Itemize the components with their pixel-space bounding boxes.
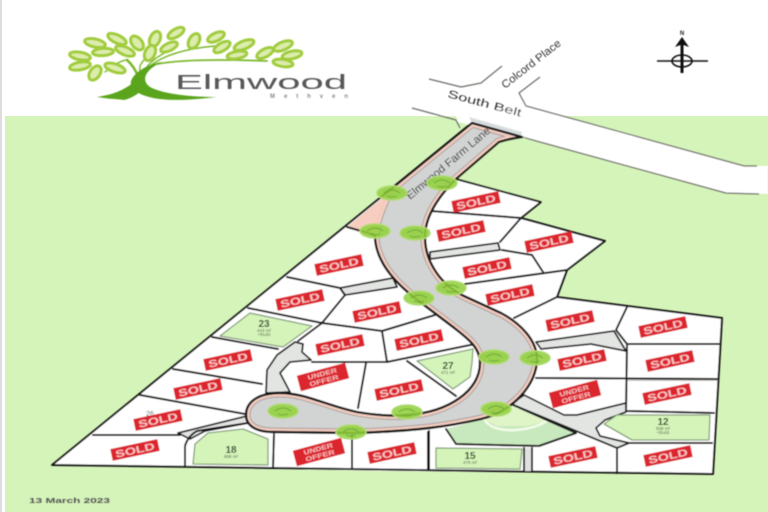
sold and under offer stickers: SOLD [379,382,420,401]
tree leaves [69,25,303,82]
lot 15: 15 [464,451,476,462]
sold and under offer stickers: SOLD [648,448,689,467]
lot 12: +Build [657,430,670,435]
sold and under offer stickers: SOLD [208,352,249,371]
south belt road [412,66,768,194]
sold and under offer stickers: SOLD [529,234,570,253]
sold and under offer stickers: UNDER [559,384,590,399]
sold and under offer stickers: SOLD [647,386,688,405]
wordmark: Elmwood: Elmwood [175,72,347,94]
sold and under offer stickers: OFFER [305,449,336,464]
lot 18 [193,429,268,465]
sold and under offer stickers: SOLD [490,287,531,306]
sold and under offer stickers: SOLD [562,352,603,371]
date: 13 March 2023 [29,498,110,505]
lot 18: 606 m² [224,454,238,459]
sold and under offer stickers: SOLD [138,412,179,431]
tree branches [105,46,267,78]
pink reserve triangle [347,190,392,240]
sold and under offer stickers: OFFER [309,374,340,389]
sold and under offer stickers: SOLD [372,445,413,464]
sold and under offer stickers: SOLD [178,381,219,400]
label: south belt: South Belt [446,88,523,120]
sold and under offer stickers: SOLD [467,260,508,279]
main road: Elmwood Farm Lane [246,123,537,433]
lanes [178,243,717,471]
sold and under offer stickers: UNDER [303,442,334,457]
wordmark: Methven: Methven [270,94,348,100]
sold and under offer stickers: UNDER [307,367,338,382]
lot 12: 938 m² [656,426,670,431]
sold and under offer stickers: SOLD [650,353,691,372]
lot 27 [417,349,473,389]
sold and under offer stickers: SOLD [320,337,361,356]
sold and under offer stickers: SOLD [115,442,156,461]
lot 12 [604,415,710,440]
lot 12: 12 [657,417,669,428]
lot number peeking behind sold label: 26 [146,411,154,418]
lot 15: 475 m² [463,460,477,465]
tree trunk [131,62,217,100]
lot boundary lines [93,211,719,473]
sold and under offer stickers: SOLD [441,223,482,242]
lot 18: 18 [225,445,237,456]
sold and under offer stickers: OFFER [561,391,592,406]
corner green notch [456,137,620,204]
lot 23: 23 [258,319,270,330]
lot 23 [220,313,312,347]
tree root [97,82,142,100]
sold and under offer stickers: SOLD [280,292,321,311]
sold and under offer stickers: SOLD [643,319,684,338]
street trees [268,176,550,439]
lot 23: 443 m² [257,328,271,333]
sold and under offer stickers: SOLD [550,313,591,332]
sold and under offer stickers [110,191,695,468]
label: colcord place: Colcord Place [499,38,564,91]
green land background [5,116,768,512]
sold and under offer stickers: SOLD [553,449,594,468]
logo: Elmwood tree [69,25,348,100]
sold and under offer stickers: SOLD [319,257,360,276]
lot 15 [436,448,522,469]
site boundary [52,123,722,474]
north arrow: N [680,31,684,37]
sold and under offer stickers: SOLD [399,332,440,351]
north arrow [657,31,708,73]
lot 23: +Build [258,332,271,337]
sold and under offer stickers: SOLD [357,304,398,323]
label: Elmwood Farm Lane: Elmwood Farm Lane [404,125,493,202]
sold and under offer stickers: SOLD [456,194,497,213]
lot 27: 27 [442,361,454,372]
left edge strip [0,0,2,512]
park reserve [446,404,576,446]
entrance apron [469,117,522,137]
lot 27: 471 m² [441,370,455,375]
site lots base [52,123,722,474]
